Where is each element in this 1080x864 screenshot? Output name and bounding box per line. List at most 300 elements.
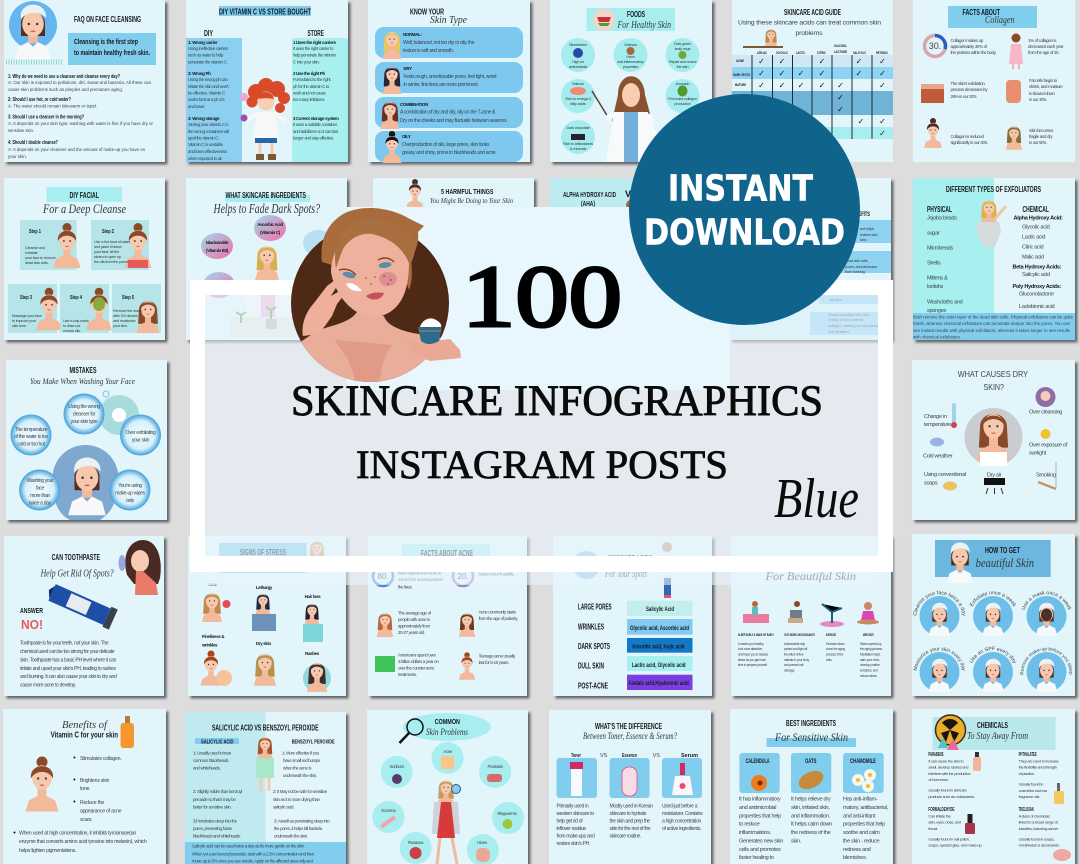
bubble: ascorbic acid: Ascorbic Acid bbox=[257, 222, 283, 227]
step 4: excess oils. bbox=[63, 328, 81, 333]
list: physical: Jojoba beads bbox=[927, 216, 957, 222]
text block: chamomile: redness and bbox=[843, 847, 871, 853]
hair back bbox=[321, 208, 424, 290]
text block: toner: restore skin's PH. bbox=[556, 841, 590, 847]
table: acids: ✓ bbox=[779, 81, 785, 90]
panel: signs of stress bbox=[188, 536, 346, 696]
heading bbox=[40, 553, 114, 580]
icon: head bbox=[626, 200, 636, 210]
chemical: parabens: PARABENS bbox=[928, 752, 944, 758]
step: spf bbox=[969, 646, 1016, 692]
step 3 bbox=[8, 284, 62, 333]
chart: 30 percent donut bbox=[924, 36, 946, 56]
icon: woman cleansing bbox=[52, 445, 118, 520]
ingredient: oats: OATS bbox=[805, 759, 816, 765]
callout: usage: Salicylic acid can be used twice a day as it's more gentle on the skin. bbox=[192, 844, 305, 848]
fact: spending bbox=[398, 652, 439, 677]
step: cleanse bbox=[913, 590, 966, 636]
text block: store: 2 Use the right Ph bbox=[293, 71, 326, 76]
fact: exfoliation: The skin's exfoliation bbox=[950, 81, 985, 86]
fact: spending: Americans spend over bbox=[398, 652, 437, 658]
text block: questions and answers: 3: Should I use a cleanser in the morning? bbox=[8, 114, 84, 120]
text block: oats bbox=[791, 796, 832, 844]
problem: rosacea bbox=[400, 832, 432, 864]
callout: first step: Cleansing is the first step bbox=[74, 39, 138, 46]
text block: calendula: Generates new skin bbox=[739, 838, 783, 844]
list: physical: Mittens & bbox=[927, 276, 948, 282]
heading: For Sensitive Skin bbox=[774, 730, 848, 744]
fact: average age: The average age of bbox=[398, 610, 432, 616]
sign: fineliness and wrinkles bbox=[200, 634, 232, 686]
cause: smoking bbox=[1036, 462, 1056, 489]
cause: conventional soaps: soaps bbox=[924, 480, 938, 486]
chemical: triclosan: linked to a broad range of bbox=[1019, 820, 1059, 824]
heading: FACTS ABOUT bbox=[962, 8, 1000, 17]
tip: antioxidants: EAT MORE ANTIOXIDANTS bbox=[784, 633, 815, 637]
text block: DIY: the wrong containers will bbox=[188, 129, 229, 134]
heading bbox=[563, 189, 637, 208]
food: walnuts: Have bbox=[626, 54, 636, 59]
text block: salicylic: common blackheads bbox=[193, 758, 229, 763]
step: remove make-up: Remove make-up before you sleep bbox=[1020, 647, 1072, 674]
tip: sleep early bbox=[738, 601, 775, 667]
text block: explanation bbox=[20, 640, 117, 688]
text block: DIY: such as water to help bbox=[188, 52, 224, 58]
step: mask: Use a mask once a week bbox=[1021, 590, 1072, 610]
callout: answer no bbox=[20, 606, 43, 632]
label: vs: VS bbox=[653, 753, 660, 759]
lips bbox=[366, 292, 384, 300]
text block: tyrosinase: helps lighten pigmentations. bbox=[19, 848, 76, 854]
decorative teal circle bbox=[99, 391, 139, 435]
panel: DIY vitamin C vs store bought: DIY bbox=[204, 29, 213, 38]
fact: puberty bbox=[479, 610, 518, 621]
text block: questions and answers: your skin. bbox=[8, 154, 27, 159]
chemical: formaldehyde: Can irritate the bbox=[928, 814, 952, 818]
text block: questions and answers: 4: Should I double cleanse? bbox=[8, 140, 58, 146]
chemical: parabens: of hormones. bbox=[928, 777, 949, 782]
text block: benzoyl bbox=[273, 750, 330, 838]
fact: 50s bbox=[1029, 128, 1054, 145]
skin type: combination: A combination of dry and oily, oily on the T-zone & bbox=[400, 110, 496, 116]
heading: ALPHA HYDROXY ACID bbox=[563, 192, 616, 199]
text block: calendula: to reduce bbox=[739, 822, 760, 828]
panel: for beautiful skin bbox=[731, 536, 891, 696]
fact: average age bbox=[398, 610, 432, 635]
chemical: triclosan bbox=[1019, 807, 1071, 861]
sign: dry skin bbox=[254, 641, 276, 686]
fact: fat cells: in our 30's. bbox=[1029, 97, 1047, 102]
fact: teenage acne: last for 5-10 years. bbox=[479, 660, 509, 665]
text block: chamomile: the skin - reduce bbox=[843, 838, 879, 844]
skin type: combination: COMBINATION bbox=[400, 102, 428, 107]
cause: over cleansing: Over cleansing bbox=[1029, 410, 1062, 416]
skin type: normal bbox=[375, 27, 523, 59]
callout: comparison: Both remove the outer layer of the dead skin cells. Physical exfoliators can be quite bbox=[913, 314, 1074, 320]
panel: salicylic acid vs benzoyl peroxide bbox=[185, 712, 346, 864]
benefit rows: the skin. bbox=[830, 297, 843, 302]
icon: woman with mirror bbox=[118, 540, 161, 595]
heading: CHEMICALS bbox=[977, 721, 1008, 730]
step 2: the oils from the pores. bbox=[94, 259, 129, 264]
text block: chamomile: properties that help bbox=[843, 822, 885, 828]
table: acids: ✓ bbox=[879, 69, 886, 78]
icon: woman with acne applying cream bbox=[290, 208, 461, 390]
step 4 bbox=[60, 284, 112, 333]
tip: antioxidants bbox=[784, 601, 815, 672]
benefit rows: It helps to bind water to bbox=[828, 317, 864, 322]
product: serum bbox=[662, 753, 702, 798]
benefit rows: Occurs naturally in the skin. bbox=[828, 312, 870, 317]
text block: questions and answers: A: It depends on your skin type; washing with water is fine if you have dry or bbox=[8, 121, 153, 126]
chart: 80 percent ring: 80. bbox=[377, 572, 389, 581]
label: blue: Blue bbox=[774, 468, 859, 530]
food: dark chocolate: Rich in antioxidants bbox=[563, 141, 593, 146]
chemical: formaldehyde: Usually found in nail polish, bbox=[928, 836, 970, 842]
light panel behind headline bbox=[347, 207, 730, 390]
text block: chamomile: blemishes. bbox=[843, 855, 867, 861]
tip: meditate: reduce stress. bbox=[860, 674, 878, 678]
benefit rows: from forming. bbox=[845, 269, 865, 274]
fact: 50s: in our 50's. bbox=[1029, 140, 1047, 145]
text block: oats: the redness of the bbox=[791, 830, 831, 836]
heading: FOODS bbox=[627, 10, 645, 19]
icon: fat cells bbox=[1006, 80, 1021, 103]
sign: fineliness and wrinkles: Fineliness & bbox=[202, 634, 225, 639]
step 4: to draw out bbox=[63, 323, 81, 328]
icon: radiation flasks bbox=[936, 715, 966, 750]
badge: instant download bbox=[629, 94, 860, 325]
icon: plants on table bbox=[230, 307, 302, 338]
problem: ringworms bbox=[492, 802, 524, 834]
text block: questions and answers: cause skin problems such as pimples and premature aging. bbox=[8, 87, 123, 92]
benefits list: Stimulates collagen. bbox=[80, 756, 121, 762]
step 2: steam to open up bbox=[94, 254, 122, 259]
text block: questions and answers: A: Our skin is exposed to pollutions, dirt, sweat and bacteria. All these can bbox=[8, 80, 151, 85]
heading bbox=[604, 555, 652, 580]
fact: 30 percent bbox=[950, 38, 997, 55]
heading: SKIN? bbox=[984, 382, 1004, 392]
label: salicylic acid bbox=[195, 738, 239, 745]
title: skincare infographics: SKINCARE INFOGRAPHICS bbox=[291, 378, 823, 425]
list: physical: PHYSICAL bbox=[927, 205, 952, 214]
list: physical: Shells bbox=[927, 260, 941, 266]
cause: cold weather: Cold weather bbox=[923, 454, 953, 460]
table: acids: ✓ bbox=[856, 57, 862, 66]
text block: DIY: 3: Wrong storage bbox=[188, 116, 220, 121]
list: chemical: Gluconolactone bbox=[1019, 292, 1054, 298]
heading bbox=[430, 187, 513, 205]
problem: psoriasis bbox=[479, 756, 511, 788]
icon: skin section bbox=[921, 84, 944, 103]
sign: lethargy: Lethargy bbox=[256, 585, 273, 590]
sign: hair loss bbox=[303, 594, 323, 642]
panel: FAQ on face cleansing bbox=[4, 0, 165, 162]
text block: DIY: be effective. Vitamin C bbox=[188, 90, 225, 96]
icon: money bbox=[375, 656, 395, 672]
chart: 80 percent ring bbox=[373, 566, 393, 586]
text block: explanation: irritate and upset your skin's PH, leading to rashes bbox=[20, 666, 116, 672]
callout: usage: move up to 5% once you see results. Apply on the affected area only as it bbox=[192, 858, 314, 864]
text block: store: ph for the vitamin C to bbox=[293, 84, 330, 89]
text block: benzoyl: underneath the skin. bbox=[274, 834, 308, 838]
eyes bbox=[339, 258, 394, 279]
skin type: oily: greasy and shiny, prone to blackheads and acne. bbox=[402, 150, 496, 156]
tip: meditate: develop positive bbox=[860, 663, 880, 667]
heading: WHAT SKINCARE INGREDIENTS bbox=[226, 191, 306, 200]
heading: KNOW YOUR bbox=[410, 8, 444, 17]
row: large pores: Salicylic Acid bbox=[646, 607, 674, 613]
heading: Skin Problems bbox=[426, 727, 468, 737]
heading: Vitamin C for your skin bbox=[51, 731, 118, 740]
table: acids: ✓ bbox=[879, 129, 886, 138]
icon: woman average age bbox=[377, 613, 393, 637]
text block: DIY: Storing your vitamin C in bbox=[188, 122, 229, 127]
step 1: Cleanse and bbox=[25, 245, 45, 250]
problem: acne bbox=[432, 742, 464, 774]
food: walnuts: anti-inflammatory bbox=[617, 59, 644, 64]
face bbox=[331, 230, 409, 317]
list: chemical: Beta Hydroxy Acids: bbox=[1012, 264, 1062, 270]
panel: ingredients for skin concerns bbox=[553, 536, 712, 696]
bubble: water temperature: cold or too hot bbox=[17, 442, 46, 448]
fact: spending: 3 billion dollars a year on bbox=[398, 659, 439, 664]
food: leafy veg: leafy vegs bbox=[675, 46, 691, 51]
heading: Skin Type bbox=[430, 15, 468, 26]
bubble: make-up wipes: You're using bbox=[118, 483, 142, 489]
tip: exercise: down the aging bbox=[826, 647, 845, 651]
text block: store: longer and stay effective. bbox=[293, 136, 334, 140]
text block: store: It uses a suitable container bbox=[293, 122, 338, 127]
cause: dry air bbox=[984, 472, 1005, 494]
skin type: normal: NORMAL: bbox=[403, 32, 422, 37]
bubble: water temperature bbox=[10, 414, 52, 456]
heading: Helps to Fade Dark Spots? bbox=[213, 202, 320, 217]
cause: dry air: Dry air bbox=[987, 472, 1002, 478]
tip: sleep early: stress as you get more bbox=[738, 658, 766, 662]
label: vs: VS bbox=[600, 753, 608, 759]
table: acids: ✓ bbox=[798, 81, 804, 90]
heading: Between Toner, Essence & Serum? bbox=[583, 731, 677, 741]
heading: DIY FACIAL bbox=[70, 191, 99, 200]
panel: skincare acid guide bbox=[732, 0, 893, 162]
heading: You Make When Washing Your Face bbox=[30, 376, 135, 386]
text block: explanation: Toothpaste is for your teeth, not your skin. The bbox=[20, 640, 109, 646]
food: dark chocolate bbox=[561, 120, 595, 154]
text block: serum: a high concentration bbox=[662, 818, 702, 824]
tip: exercise: EXERCISE bbox=[826, 633, 836, 637]
label: benzoyl peroxide: BENSZOYL PEROXIDE bbox=[292, 739, 335, 745]
callout: comparison: with chemical exfoliators. bbox=[913, 334, 961, 340]
icon: woman with magnifier bbox=[432, 781, 460, 864]
list: chemical: Glycolic acid bbox=[1022, 224, 1050, 230]
text block: benzoyl: underneath the skin. bbox=[283, 773, 317, 778]
sign: rashes bbox=[303, 651, 331, 692]
text block: calendula: cells and promotes bbox=[739, 847, 781, 853]
food: salmon bbox=[561, 79, 595, 113]
sign: lethargy bbox=[252, 585, 276, 631]
tip: sleep early: It makes you healthy, bbox=[738, 642, 764, 646]
chart: 20 percent ring bbox=[453, 566, 473, 586]
fact: 30 percent: the proteins within the body. bbox=[950, 50, 997, 55]
step 2: Use a hot bowl of water bbox=[94, 239, 131, 244]
heading: SKINCARE ACIDS bbox=[608, 555, 652, 562]
icon: face 50s bbox=[1006, 127, 1022, 150]
panel: facts about acne bbox=[368, 536, 527, 696]
table: acids: ✓ bbox=[879, 57, 886, 66]
text block: benzoyl: the pores, it helps kill bacteria bbox=[274, 826, 323, 831]
title: 100: 100 bbox=[462, 249, 622, 346]
text block: serum bbox=[662, 804, 703, 832]
row: dull skin: DULL SKIN bbox=[578, 662, 604, 670]
fact: 80 percent: have experienced acne in bbox=[398, 570, 442, 576]
problem: rosacea: Rosacea bbox=[408, 840, 424, 845]
step 3: skin tone. bbox=[12, 323, 27, 328]
row: large pores bbox=[578, 601, 692, 616]
tip: meditate: calm your mind, bbox=[860, 658, 880, 662]
step: spf: Use an SPF every day bbox=[969, 646, 1016, 663]
heading: Help Get Rid Of Spots? bbox=[40, 568, 114, 580]
step 1: exfoliate bbox=[25, 250, 39, 255]
list: chemical: Lactobionic acid bbox=[1019, 304, 1055, 310]
text block: explanation: skin. Toothpaste has a basic PH level where it can bbox=[20, 658, 117, 664]
text block: serum: of active ingredients. bbox=[662, 826, 701, 832]
fact: spending: treatments. bbox=[398, 672, 417, 677]
text block: calendula bbox=[739, 796, 783, 861]
bubble: niacinamide: (Vitamin B3) bbox=[206, 248, 229, 253]
fact: 40s bbox=[950, 134, 988, 145]
ingredient: chamomile: CHAMOMILE bbox=[850, 759, 876, 765]
tip: sleep early: time to prepare yourself. bbox=[738, 663, 768, 667]
fact: 40s: Collagen is reduced bbox=[950, 134, 984, 139]
callout: usage bbox=[185, 842, 346, 864]
text block: benzoyl: when the acne is bbox=[283, 766, 312, 770]
bubble: niacinamide: Niacinamide bbox=[206, 240, 229, 245]
text block: essence: skincare to hydrate bbox=[610, 811, 647, 817]
panel: common skin problems bbox=[367, 710, 528, 864]
heading bbox=[586, 8, 675, 31]
step 1: Step 1 bbox=[29, 229, 41, 235]
benefit rows: collagen, making your skin plump bbox=[828, 323, 880, 328]
food: salmon: Salmon bbox=[572, 81, 584, 86]
bubble: over exfoliating: Over exfoliating bbox=[126, 430, 156, 436]
text block: store: C into your skin. bbox=[293, 60, 319, 64]
bubble: washing too often: twice a day bbox=[29, 500, 52, 506]
panel: alpha hydroxy acid bbox=[550, 178, 711, 340]
bubble: water temperature: of the water is too bbox=[14, 434, 48, 440]
text block: explanation: cause more acne to develop. bbox=[20, 682, 76, 688]
heading: COMMON bbox=[435, 719, 460, 726]
text block: serum: Used just before a bbox=[662, 804, 698, 810]
table: acids: ✓ bbox=[819, 57, 825, 66]
text block: DIY: 2: Wrong Ph bbox=[188, 71, 211, 76]
callout: comparison: harsh, whereas chemical exfoliators can penetrate deeper into the pores. You can bbox=[913, 321, 1071, 326]
heading: For Beautiful Skin bbox=[764, 569, 856, 583]
list: chemical: Malic acid bbox=[1022, 254, 1044, 260]
text block: questions and answers: sensitive skin. bbox=[8, 128, 34, 133]
text block: toner: western skincare to bbox=[556, 811, 594, 817]
heading: FACTS ABOUT ACNE bbox=[421, 549, 473, 558]
text block: essence: the skin and prep the bbox=[610, 818, 650, 824]
table: acids: SALICYLIC bbox=[853, 50, 866, 55]
benefit rows: ives bbox=[860, 237, 866, 242]
panel: how to get beautiful skin bbox=[912, 534, 1080, 700]
step: moisturize: Moisturize your skin every day bbox=[913, 647, 965, 670]
table: acids: ✓ bbox=[837, 93, 844, 102]
table: acids: ✓ bbox=[879, 117, 886, 126]
icon: woman cleansing face bbox=[6, 1, 62, 62]
tip: antioxidants: and prevent cell bbox=[784, 663, 804, 667]
callout: first step: to maintain healthy fresh skin. bbox=[74, 50, 150, 57]
row: dark spots: Ascorbic acid, Kojic acid bbox=[632, 644, 685, 650]
step 3: Massage your face bbox=[12, 313, 43, 318]
benefit rows: ant helps bbox=[860, 226, 874, 231]
heading: Collagen bbox=[985, 15, 1014, 26]
fact: spending: over the counter acne bbox=[398, 666, 435, 670]
text block: calendula: faster healing to bbox=[739, 855, 774, 861]
chemical: phthalates: PHTHALATES bbox=[1019, 752, 1037, 758]
text block: toner: Primarily used in bbox=[556, 804, 589, 810]
text block: questions and answers bbox=[8, 74, 153, 159]
text block: toner bbox=[556, 804, 595, 847]
text block: tyrosinase: When used at high concentration, it inhibits tyrosinase(an bbox=[19, 830, 136, 836]
table: acids: ✓ bbox=[819, 81, 825, 90]
text block: salicylic: 1: Usually used to treat bbox=[193, 750, 232, 756]
fact: adults: cases occur in adults. bbox=[479, 572, 514, 576]
text block: calendula: properties that help bbox=[739, 814, 781, 820]
sign: fineliness and wrinkles: wrinkles bbox=[201, 642, 218, 648]
text block: serum: moisturizer. Contains bbox=[662, 811, 703, 817]
heading bbox=[933, 717, 1056, 750]
food: salmon: fatty acids bbox=[570, 101, 586, 106]
heading bbox=[42, 187, 126, 216]
text block: DIY: spoil the vitamin C. bbox=[188, 136, 219, 140]
benefit rows: and hydrated. bbox=[828, 329, 849, 334]
row: dull skin: Lactic acid, Glycolic acid bbox=[632, 663, 686, 669]
step: cleanse: Cleanse your face twice a day bbox=[913, 590, 966, 616]
problem: ringworms: Ringworms bbox=[497, 811, 518, 816]
panel: 5 harmful things bbox=[373, 178, 534, 340]
fact: 1 percent bbox=[1028, 38, 1064, 55]
list: physical: Microbeads bbox=[927, 246, 953, 252]
text block: store: 1 Uses the right carriers bbox=[293, 40, 337, 45]
problem: eczema bbox=[372, 801, 404, 833]
tip: exercise: process of the bbox=[826, 652, 844, 656]
text block: explanation: chemical used can be too strong for your delicate bbox=[20, 649, 115, 655]
text block: explanation: and burning. It can also cause your skin to dry and bbox=[20, 674, 117, 680]
text block: DIY: Using the wrong ph can bbox=[188, 77, 228, 82]
fact: 1 percent: from the age of 20. bbox=[1028, 50, 1059, 55]
callout: first step bbox=[68, 33, 156, 65]
icon: teacher with pointer bbox=[592, 76, 656, 162]
tip: meditate: emotions, and bbox=[860, 668, 878, 672]
icon: toothpaste tube bbox=[44, 581, 118, 630]
ingredient: calendula bbox=[739, 753, 780, 793]
food: dark chocolate: Dark chocolate bbox=[566, 125, 591, 130]
fact: exfoliation bbox=[950, 81, 988, 99]
food: blueberries bbox=[561, 38, 595, 72]
chemical: formaldehyde: skin, eyes, nose, and bbox=[928, 820, 961, 824]
label: salicylic acid: SALICYLIC ACID bbox=[201, 739, 234, 745]
list: chemical: Salicylic acid bbox=[1022, 272, 1050, 278]
step: remove make-up bbox=[1020, 647, 1072, 692]
ingredient: chamomile bbox=[843, 753, 884, 793]
icon: worried woman bbox=[406, 179, 424, 209]
text block: benzoyl: 2: It May not be safe for sensitive bbox=[273, 789, 328, 794]
text block: chamomile: matory, antibacterial, bbox=[843, 805, 889, 811]
bubble: wrong cleanser bbox=[64, 394, 104, 434]
step 1 bbox=[20, 220, 80, 270]
